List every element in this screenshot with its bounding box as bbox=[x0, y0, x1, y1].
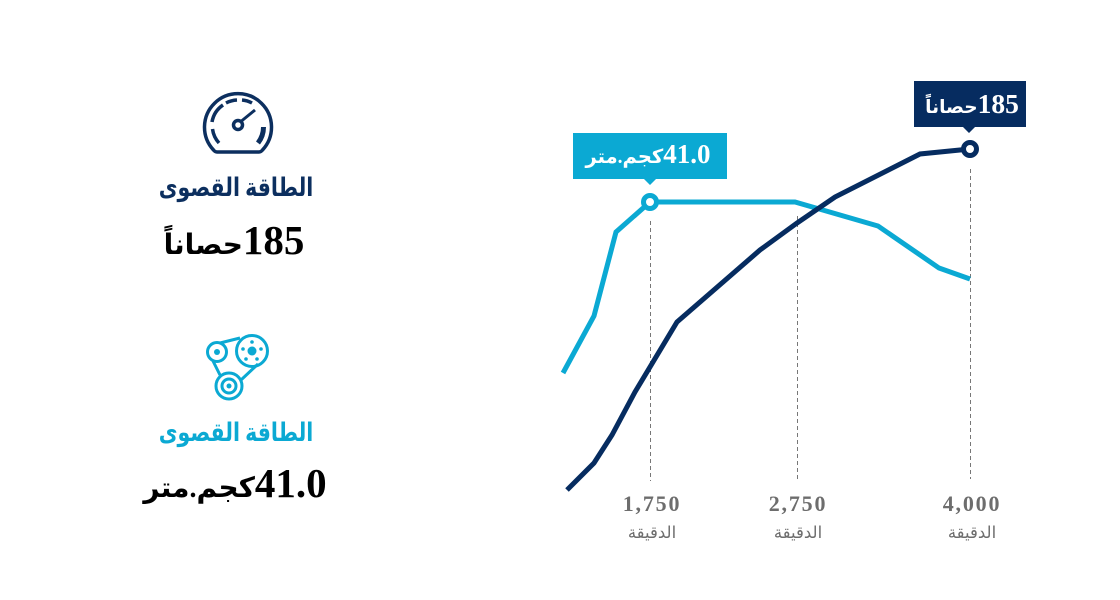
axis label: 2,750 bbox=[769, 491, 827, 542]
line chart: power and torque curves bbox=[563, 81, 1026, 542]
heading: maximum torque: الطاقة القصوى bbox=[159, 419, 313, 448]
panel: maximum power bbox=[159, 94, 313, 263]
torque curve bbox=[563, 202, 970, 373]
icon: speedometer bbox=[204, 94, 272, 152]
callout: power: 185حصاناً bbox=[925, 88, 1019, 119]
axis label: 4,000 bbox=[943, 491, 1001, 542]
icon: belt and pulleys bbox=[208, 336, 268, 399]
callout: torque: 41.0كجم.متر bbox=[585, 139, 710, 169]
axis label: 1,750: الدقيقة bbox=[628, 523, 676, 542]
axis label: 1,750 bbox=[623, 491, 681, 542]
panel: maximum torque bbox=[141, 336, 327, 506]
torque peak marker bbox=[644, 196, 656, 208]
value: 185 hp: 185حصاناً bbox=[164, 217, 304, 263]
axis label: 1,750: 1,750 bbox=[623, 491, 681, 516]
axis label: 2,750: 2,750 bbox=[769, 491, 827, 516]
value: 41.0 kg.m: 41.0كجم.متر bbox=[141, 460, 327, 506]
callout: power bbox=[914, 81, 1026, 133]
heading: maximum power: الطاقة القصوى bbox=[159, 174, 313, 203]
power curve bbox=[567, 149, 970, 490]
power peak marker bbox=[964, 142, 976, 156]
callout: torque bbox=[573, 133, 727, 185]
guide lines bbox=[650, 169, 970, 481]
axis label: 4,000: الدقيقة bbox=[948, 523, 996, 542]
axis label: 2,750: الدقيقة bbox=[774, 523, 822, 542]
axis label: 4,000: 4,000 bbox=[943, 491, 1001, 516]
